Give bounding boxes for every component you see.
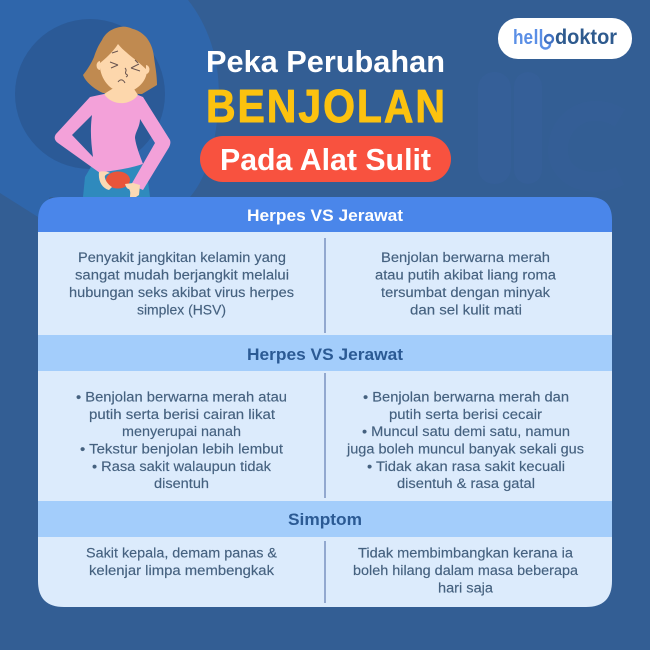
row 2 right text: • Muncul satu demi satu, namun [362,424,570,439]
row 3 divider [324,541,326,603]
row 3 left text [86,546,277,578]
row 1 right text: tersumbat dengan minyak [381,285,550,300]
backdrop circle behind figure [15,19,165,169]
comparison table card [38,197,612,607]
row 2 right text: disentuh & rasa gatal [397,476,535,491]
row 1 left text: sangat mudah berjangkit melalui [75,268,289,282]
title: BENJOLAN: BENJOLAN [206,81,445,133]
row 3 left text: kelenjar limpa membengkak [89,563,274,578]
hands [99,171,140,197]
torso and arms [55,94,170,190]
row 1 left text [69,250,294,318]
row 3 right text [353,546,579,596]
row 3 right text: hari saja [438,580,494,596]
eyes, nose and mouth [110,51,140,83]
row 2 left text: menyerupai nanah [122,424,241,439]
title: Peka Perubahan: Peka Perubahan [206,44,445,79]
face [100,44,147,93]
ears [97,61,149,74]
row 1 left text: simplex (HSV) [137,302,226,318]
row 1 right text [375,250,557,318]
red spot [106,172,130,188]
row 3 right text: boleh hilang dalam masa beberapa [353,563,579,578]
band: Simptom: Simptom [288,510,362,529]
band: Herpes VS Jerawat: Herpes VS Jerawat [247,345,403,364]
illustration: woman holding lower abdomen [55,27,170,197]
logo: hellodoktor [498,18,632,59]
row 2 right text: putih serta berisi cecair [389,407,543,422]
row 2 left text: • Benjolan berwarna merah atau [76,390,287,404]
row 2 left text [76,390,287,491]
subtitle pill [200,136,451,182]
header: Herpes VS Jerawat: Herpes VS Jerawat [247,206,403,225]
row 2 right text: • Tidak akan rasa sakit kecuali [367,459,565,474]
row 3 right text: Tidak membimbangkan kerana ia [358,546,574,560]
logo: hellodoktor: doktor [555,26,617,49]
row 1 right text: Benjolan berwarna merah [381,250,550,265]
row 2 left text: disentuh [154,476,209,491]
header: Herpes VS Jerawat [38,197,612,232]
neck [104,89,138,103]
row 1 left text: Penyakit jangkitan kelamin yang [78,250,286,265]
card base [38,232,612,607]
row 2 left text: • Tekstur benjolan lebih lembut [80,442,283,456]
row 2 right text [346,390,584,491]
band: Herpes VS Jerawat [38,335,612,371]
row 3 left text: Sakit kepala, demam panas & [86,546,277,560]
logo: hellodoktor: he [513,27,533,49]
row 1 right text: atau putih akibat liang roma [375,268,557,282]
hair [83,27,157,94]
jeans [83,165,150,197]
subtitle pill: Pada Alat Sulit [220,142,431,177]
row 2 left text: • Rasa sakit walaupun tidak [92,459,271,474]
row 2 right text: • Benjolan berwarna merah dan [363,390,569,404]
row 2 right text: juga boleh muncul banyak sekali gus [346,442,584,456]
band: Simptom [38,501,612,537]
row 1 right text: dan sel kulit mati [410,302,522,318]
row 1 divider [324,238,326,333]
row 1 left text: hubungan seks akibat virus herpes [69,285,294,300]
row 2 divider [324,373,326,498]
row 2 left text: putih serta berisi cairan likat [89,407,275,422]
